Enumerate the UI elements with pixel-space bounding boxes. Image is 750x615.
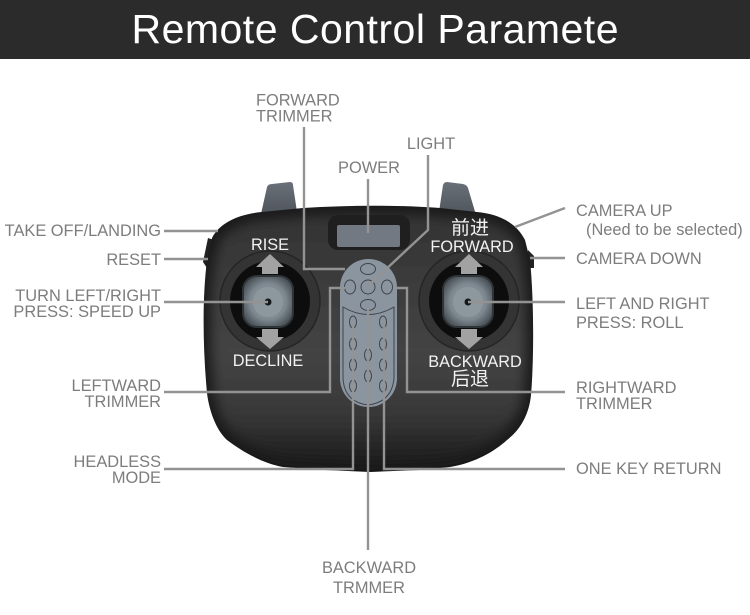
arrow: rise [256, 254, 284, 274]
left callout labels: MODE [112, 469, 161, 487]
right callout labels: (Need to be selected) [586, 221, 743, 239]
left callout labels: TRIMMER [85, 393, 161, 411]
bottom callout label: BACKWARD [322, 559, 416, 577]
title banner: Remote Control Paramete [132, 6, 618, 52]
left callout labels: HEADLESS [74, 453, 161, 471]
labels on controller: FORWARD [430, 238, 514, 256]
left callout labels: RESET [106, 251, 161, 269]
left joystick [220, 251, 320, 351]
bottom callout label [322, 559, 416, 597]
left callout labels: LEFTWARD [71, 377, 161, 395]
side buttons [203, 238, 534, 268]
icon: right antenna [439, 182, 476, 215]
labels on controller: DECLINE [233, 352, 303, 370]
power switch [328, 215, 410, 250]
left callout labels: TAKE OFF/LANDING [5, 222, 161, 240]
labels on controller: 后退 [451, 368, 489, 390]
right callout labels [576, 202, 743, 478]
bottom callout label: TRMMER [333, 579, 405, 597]
arrow: forward [455, 254, 483, 274]
top callout labels: LIGHT [407, 135, 455, 153]
button panel [340, 259, 397, 407]
right joystick [419, 251, 519, 351]
right callout labels: RIGHTWARD [576, 379, 677, 397]
controller body [195, 200, 540, 480]
right callout labels: ONE KEY RETURN [576, 460, 721, 478]
left callout labels [5, 222, 161, 487]
arrow: decline [256, 329, 284, 349]
labels on controller: BACKWARD [428, 353, 522, 371]
right callout labels: CAMERA DOWN [576, 250, 702, 268]
labels on controller: 前进 [451, 217, 489, 239]
controller illustration [195, 182, 540, 480]
right callout labels: LEFT AND RIGHT [576, 295, 710, 313]
top callout labels: TRIMMER [256, 108, 333, 126]
labels on controller: RISE [251, 236, 289, 254]
labels on controller [233, 217, 522, 390]
right callout labels: TRIMMER [576, 395, 653, 413]
arrow: backward [455, 329, 483, 349]
left callout labels: PRESS: SPEED UP [13, 303, 161, 321]
top callout labels: FORWARD [256, 92, 340, 110]
left callout labels: TURN LEFT/RIGHT [15, 287, 161, 305]
icon: left antenna [261, 182, 297, 214]
top callout labels: POWER [338, 159, 400, 177]
right callout labels: PRESS: ROLL [576, 314, 684, 332]
leader lines [164, 127, 565, 550]
title banner [0, 0, 750, 59]
top callout labels [256, 92, 455, 177]
right callout labels: CAMERA UP [576, 202, 673, 220]
